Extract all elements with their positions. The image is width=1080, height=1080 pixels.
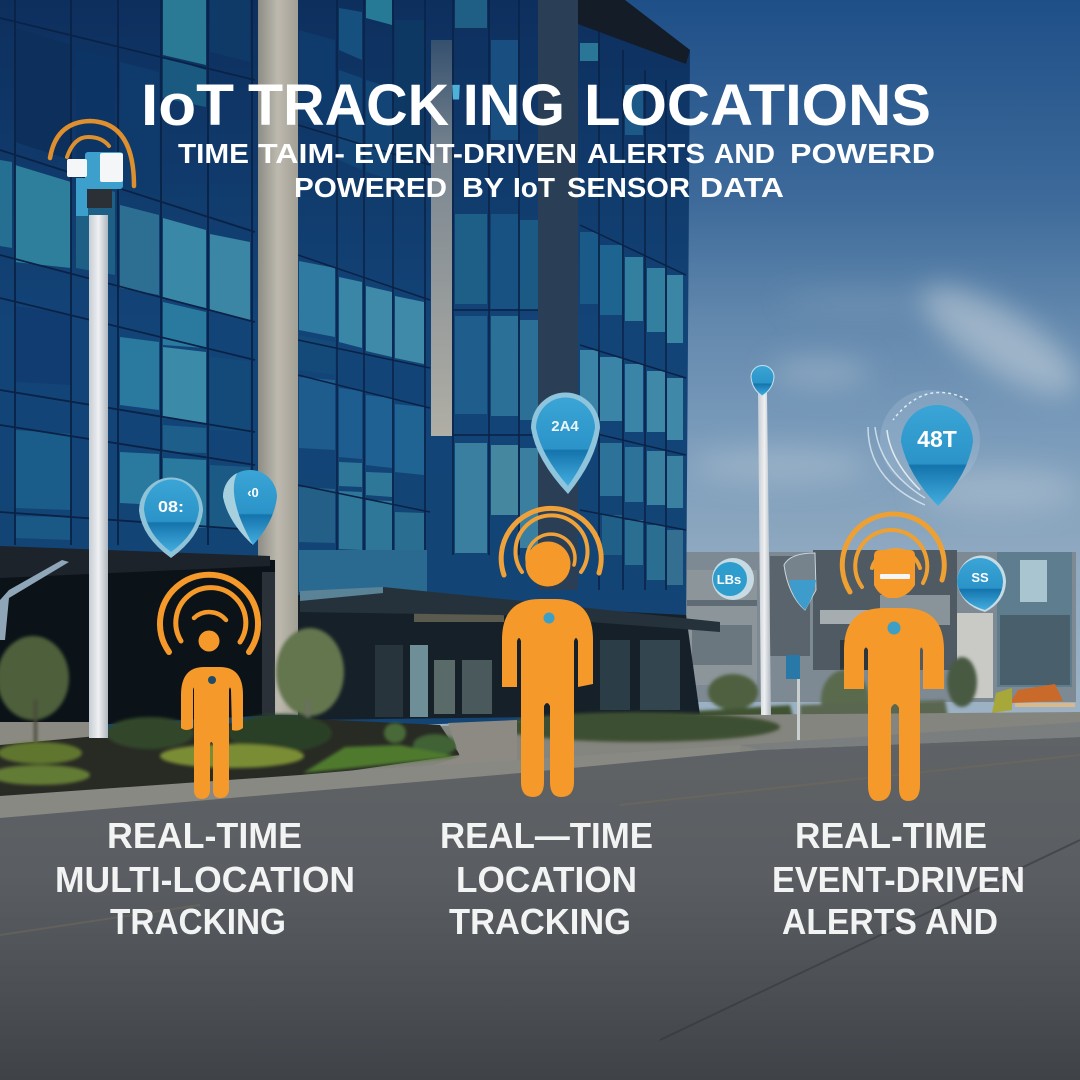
label: multi-location tracking — [55, 815, 355, 942]
middle-right glass panes — [455, 0, 538, 553]
middle glass panes — [299, 0, 424, 553]
road — [0, 737, 1080, 1080]
map pin: left 08 — [139, 477, 203, 558]
map pin: center 2A4 — [531, 392, 600, 494]
map pin: SS — [957, 555, 1006, 612]
subtitle: TAIM- — [258, 138, 345, 169]
icon: signal arcs — [160, 575, 258, 652]
label: location tracking: LOCATION — [456, 859, 637, 900]
subtitle: BY — [462, 172, 504, 203]
trees — [0, 628, 780, 785]
subtitle: AND — [714, 138, 775, 169]
head — [526, 542, 570, 586]
distant buildings — [686, 550, 1076, 702]
subtitle: POWERD — [790, 138, 935, 169]
label: location tracking: TRACKING — [449, 901, 631, 942]
right glass panes — [580, 43, 683, 585]
map pin: building-tone — [784, 553, 816, 610]
icon: signal arcs — [842, 514, 944, 592]
body — [844, 608, 944, 801]
map pin: SS: SS — [971, 570, 989, 585]
map pin: center 2A4: 2A4 — [551, 418, 579, 435]
subtitle: EVENT-DRIVEN — [354, 138, 577, 169]
map pin: LBs — [712, 558, 754, 600]
subtitle: ALERTS — [587, 138, 705, 169]
label: multi-location tracking: REAL-TIME — [107, 815, 302, 856]
left mullions — [0, 0, 255, 545]
head — [198, 630, 220, 652]
body — [502, 599, 593, 797]
icon: camera — [67, 152, 123, 216]
label: event-driven alerts: EVENT-DRIVEN — [772, 859, 1025, 900]
title: IoT — [141, 73, 234, 138]
title: TRACK'ING — [248, 73, 565, 138]
label: multi-location tracking: MULTI-LOCATION — [55, 859, 355, 900]
left glass panes — [0, 0, 250, 540]
label: location tracking — [440, 815, 653, 942]
middle and right mullions — [298, 0, 686, 590]
chest sensor — [208, 676, 216, 684]
subtitle: IoT — [513, 172, 555, 203]
subtitle: DATA — [700, 172, 784, 203]
map pin: left 08: 08: — [158, 499, 184, 516]
icon: signal arcs — [501, 508, 601, 575]
label: event-driven alerts: REAL-TIME — [795, 815, 987, 856]
canopies — [0, 546, 270, 578]
street sign — [786, 655, 800, 740]
excavator — [992, 684, 1075, 713]
concrete columns — [258, 0, 298, 715]
head — [874, 550, 915, 598]
map pin: left 40: ‹0 — [247, 485, 259, 500]
clouds — [690, 267, 1080, 512]
road details — [0, 755, 1080, 1040]
entrance walkway — [400, 720, 517, 775]
map pin: left 40 — [223, 470, 277, 545]
chest sensor — [544, 612, 554, 624]
map pin: right 48T with signal rings — [868, 390, 980, 506]
curb sidewalk — [0, 745, 740, 818]
main office building — [0, 0, 720, 740]
chest sensor — [888, 622, 900, 634]
ground: planting and sidewalk — [0, 628, 1080, 820]
label: event-driven alerts: ALERTS AND — [782, 901, 998, 942]
label: multi-location tracking: TRACKING — [110, 901, 286, 942]
subtitle: POWERED — [294, 172, 447, 203]
roof cap — [578, 0, 690, 64]
subtitle — [178, 138, 935, 203]
lobby glazing — [375, 610, 680, 717]
dark ground floor entrance — [0, 555, 275, 730]
body — [181, 667, 243, 799]
person: left figure — [160, 575, 258, 799]
map pin: right 48T with signal rings: 48T — [917, 426, 957, 452]
visor — [880, 574, 910, 579]
title: LOCATIONS — [584, 73, 931, 138]
background: sky — [0, 0, 1080, 800]
street pole with pin — [751, 366, 774, 715]
person: center figure — [501, 508, 601, 797]
sensor pole — [50, 121, 134, 738]
right hedges — [680, 657, 977, 748]
map pin: LBs: LBs — [717, 572, 741, 587]
subtitle: TIME — [178, 138, 249, 169]
map pin: pole top — [751, 366, 774, 396]
title — [141, 73, 931, 138]
person: right figure — [842, 514, 944, 801]
subtitle: SENSOR — [567, 172, 690, 203]
label: location tracking: REAL—TIME — [440, 815, 653, 856]
label: event-driven alerts — [772, 815, 1025, 942]
icon: wifi arcs — [50, 121, 134, 186]
